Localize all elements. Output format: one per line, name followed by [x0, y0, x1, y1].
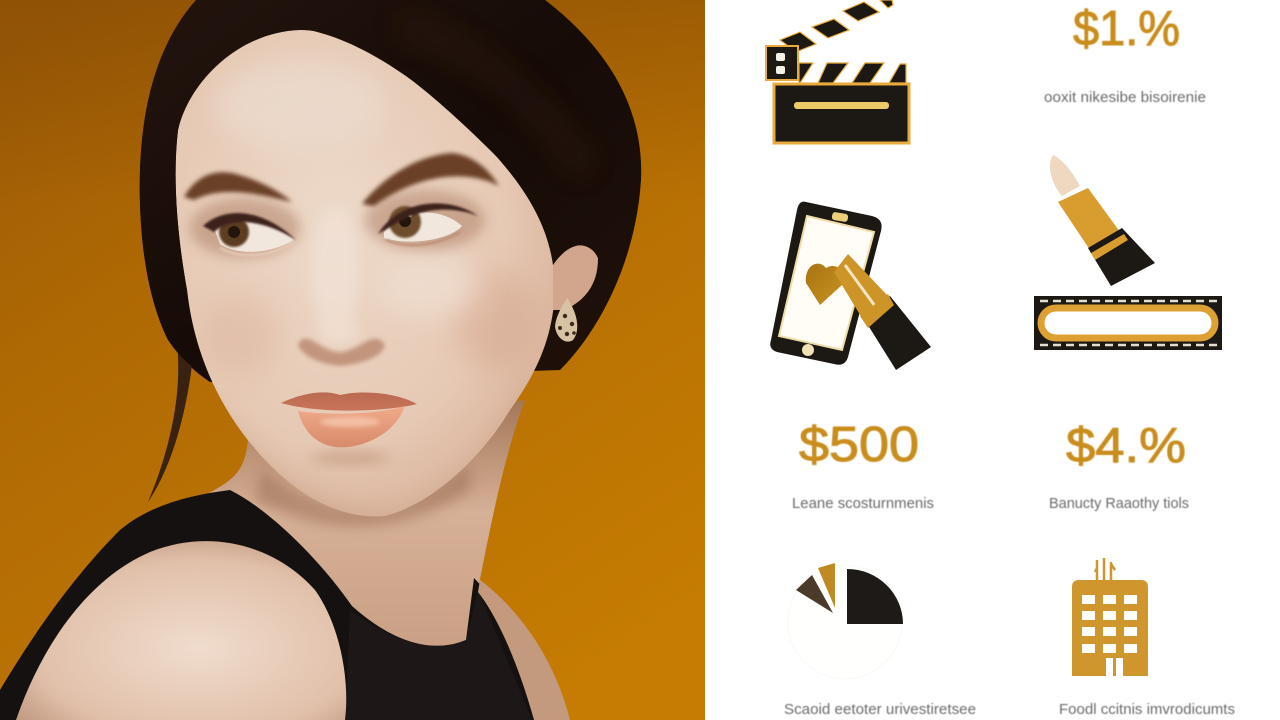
stat: $500: $500 [799, 418, 919, 472]
orange gradient backdrop [0, 0, 705, 720]
panel: right white column [705, 0, 1280, 720]
lips [281, 392, 417, 447]
icon: film clapperboard [766, 0, 909, 143]
nose bridge highlight [312, 216, 358, 318]
earring [555, 298, 577, 342]
eye: right [378, 203, 478, 245]
caption: ooxit nikesibe bisoirenie [1044, 89, 1206, 106]
right shoulder [478, 580, 570, 720]
caption: Leane scosturnmenis [792, 495, 934, 512]
nose [298, 315, 385, 366]
icon: office building [1072, 558, 1148, 676]
shoulder [16, 541, 346, 720]
hair back and side [140, 0, 641, 502]
neck [205, 400, 525, 650]
panel: portrait photo [0, 0, 705, 720]
cheek shadow right [455, 270, 535, 370]
front hair sweep [140, 0, 598, 366]
stat: $4.% [1049, 419, 1189, 512]
forehead highlight [217, 62, 376, 142]
eye: left [203, 213, 296, 255]
pie chart caption: Scaoid eetoter urivestiretsee [784, 701, 976, 718]
ear [553, 245, 598, 310]
caption: Banucty Raaothy tiols [1049, 495, 1189, 512]
chin shadow under lip [310, 451, 390, 465]
neck shadow [255, 465, 470, 527]
lipstick bullet [1050, 155, 1080, 196]
cheek highlight [380, 253, 480, 317]
cheek left [207, 298, 276, 370]
eye socket left [190, 198, 300, 258]
face [176, 30, 560, 540]
dress [0, 490, 560, 720]
heart [806, 264, 844, 305]
tray [1034, 296, 1222, 350]
eyebrows [184, 153, 499, 206]
stat: $4.%: $4.% [1066, 419, 1186, 473]
hair highlight [400, 25, 585, 170]
jaw shadow [260, 454, 392, 516]
icon: phone with heart and lipstick [770, 202, 931, 370]
lipstick [834, 254, 931, 370]
eye socket right [365, 190, 485, 250]
pie chart [788, 563, 903, 679]
stat: $1.% [1044, 2, 1206, 106]
icon: lipstick over pill tray [1034, 155, 1222, 350]
caption: bottom right: Foodl ccitnis imvrodicumts [1059, 701, 1235, 718]
stat: $500 [792, 418, 934, 512]
stat: $1.%: $1.% [1073, 2, 1180, 56]
